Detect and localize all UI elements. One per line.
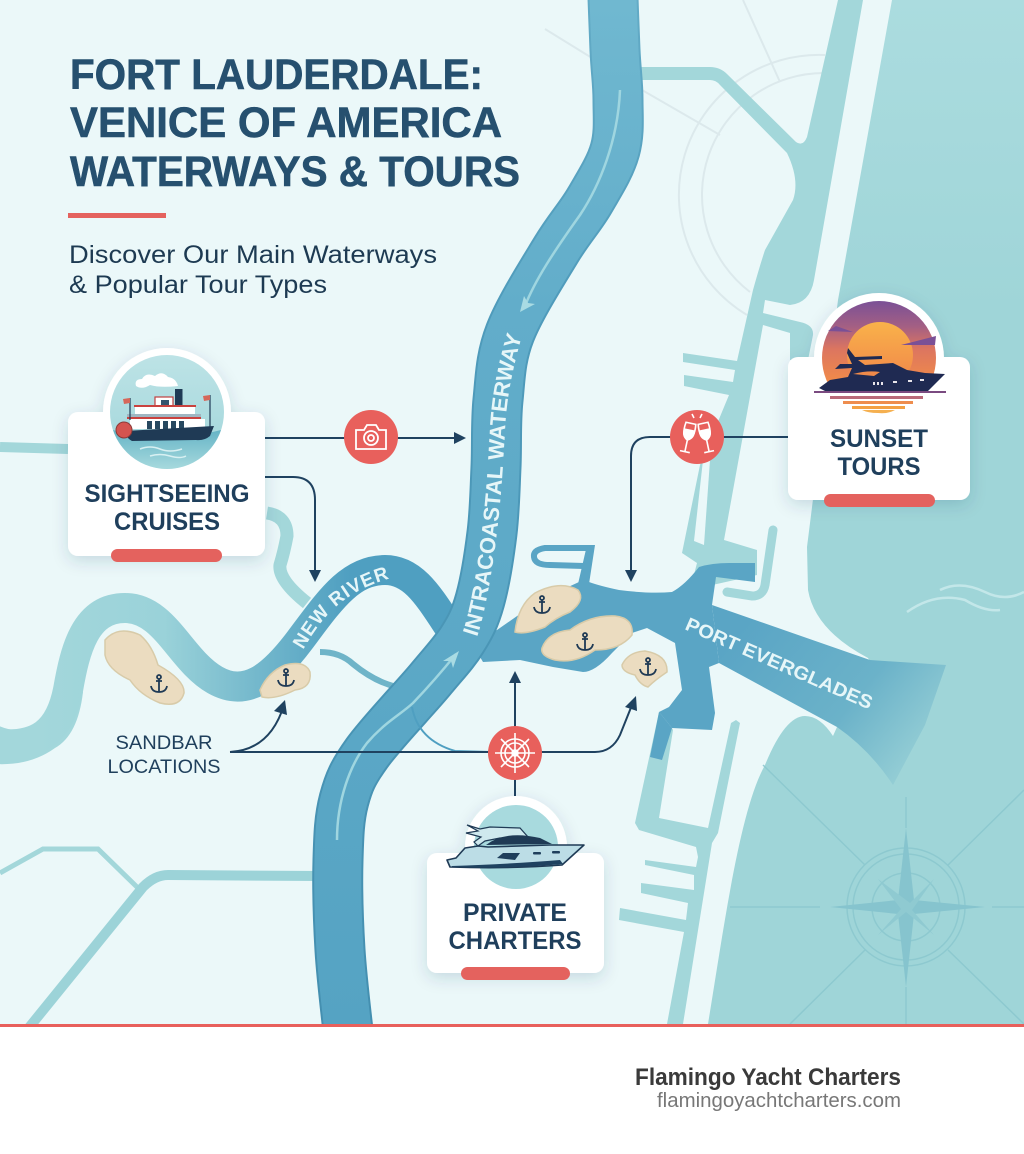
title accent rule <box>68 213 166 218</box>
flow arrowheads <box>443 296 535 668</box>
flow arrow: south <box>337 654 456 840</box>
card heading <box>448 899 582 955</box>
label: port everglades: PORT EVERGLADES <box>682 614 876 714</box>
label: new river: NEW RIVER <box>292 568 389 649</box>
subtitle: & Popular Tour Types <box>69 271 327 299</box>
title <box>70 51 520 196</box>
card heading <box>830 425 928 481</box>
icon badge: champagne glasses <box>670 410 724 464</box>
port basin <box>470 545 755 730</box>
sandbar: new river <box>260 664 310 698</box>
connector: helm to private charters <box>514 780 516 796</box>
card accent bar <box>111 549 222 562</box>
card heading <box>84 480 250 536</box>
subtitle <box>69 241 437 299</box>
port basin: hook connector <box>578 545 595 584</box>
canal: L-shaped stub <box>727 530 773 596</box>
card heading: CRUISES <box>114 508 220 536</box>
sandbar: basin middle <box>542 616 632 661</box>
label: intracoastal waterway: INTRACOASTAL WATERWAY <box>463 332 520 636</box>
thin connector behind helm <box>412 707 490 752</box>
card: sightseeing cruises <box>68 348 265 562</box>
anchor icon <box>534 596 550 613</box>
anchor icon <box>640 658 656 675</box>
label: sandbar locations: SANDBAR <box>116 733 212 754</box>
port basin: hook inlet <box>534 548 592 566</box>
title: WATERWAYS & TOURS <box>70 148 520 196</box>
card accent bar <box>824 494 935 507</box>
waterway: port everglades channel <box>712 605 946 785</box>
title: FORT LAUDERDALE: <box>70 51 483 99</box>
icon: sunset yacht <box>814 301 946 415</box>
card heading: PRIVATE <box>463 899 567 927</box>
subtitle: Discover Our Main Waterways <box>69 241 437 269</box>
sandbar: basin north <box>515 586 581 633</box>
card: private charters <box>427 796 604 980</box>
icon badge: camera <box>344 410 398 464</box>
card heading: TOURS <box>838 453 920 481</box>
icon badge: ship helm <box>488 726 542 780</box>
card: sunset tours <box>788 293 970 507</box>
icon: motor yacht <box>447 805 584 889</box>
title: VENICE OF AMERICA <box>70 99 502 147</box>
anchor icon <box>151 675 167 692</box>
waterway: intracoastal <box>337 0 620 1040</box>
ocean <box>708 0 1024 1024</box>
connector arrows <box>230 437 788 795</box>
canal: north branch and marina <box>640 0 863 596</box>
sandbar: basin south <box>622 651 667 687</box>
brand name: Flamingo Yacht Charters <box>635 1064 901 1091</box>
waterway: new river <box>0 570 465 764</box>
compass rose <box>730 765 1024 1024</box>
card accent bar <box>461 967 570 980</box>
arrowheads <box>274 432 637 715</box>
card heading: SUNSET <box>830 425 928 453</box>
icon: paddle steamer <box>110 355 224 469</box>
ocean waves <box>907 585 1024 612</box>
footer panel <box>0 1024 1024 1154</box>
faint street grid <box>545 0 825 315</box>
anchor icon <box>278 669 294 686</box>
label: sandbar locations <box>108 733 220 778</box>
sandbar: west river <box>105 631 184 704</box>
canal: south marina <box>619 712 740 1024</box>
card heading: SIGHTSEEING <box>84 480 250 508</box>
canals: west side <box>0 447 397 1030</box>
brand url: flamingoyachtcharters.com <box>657 1090 901 1112</box>
anchor icon <box>577 633 593 650</box>
label: sandbar locations: LOCATIONS <box>108 757 220 778</box>
card heading: CHARTERS <box>448 927 582 955</box>
flow arrow: north <box>525 90 620 306</box>
